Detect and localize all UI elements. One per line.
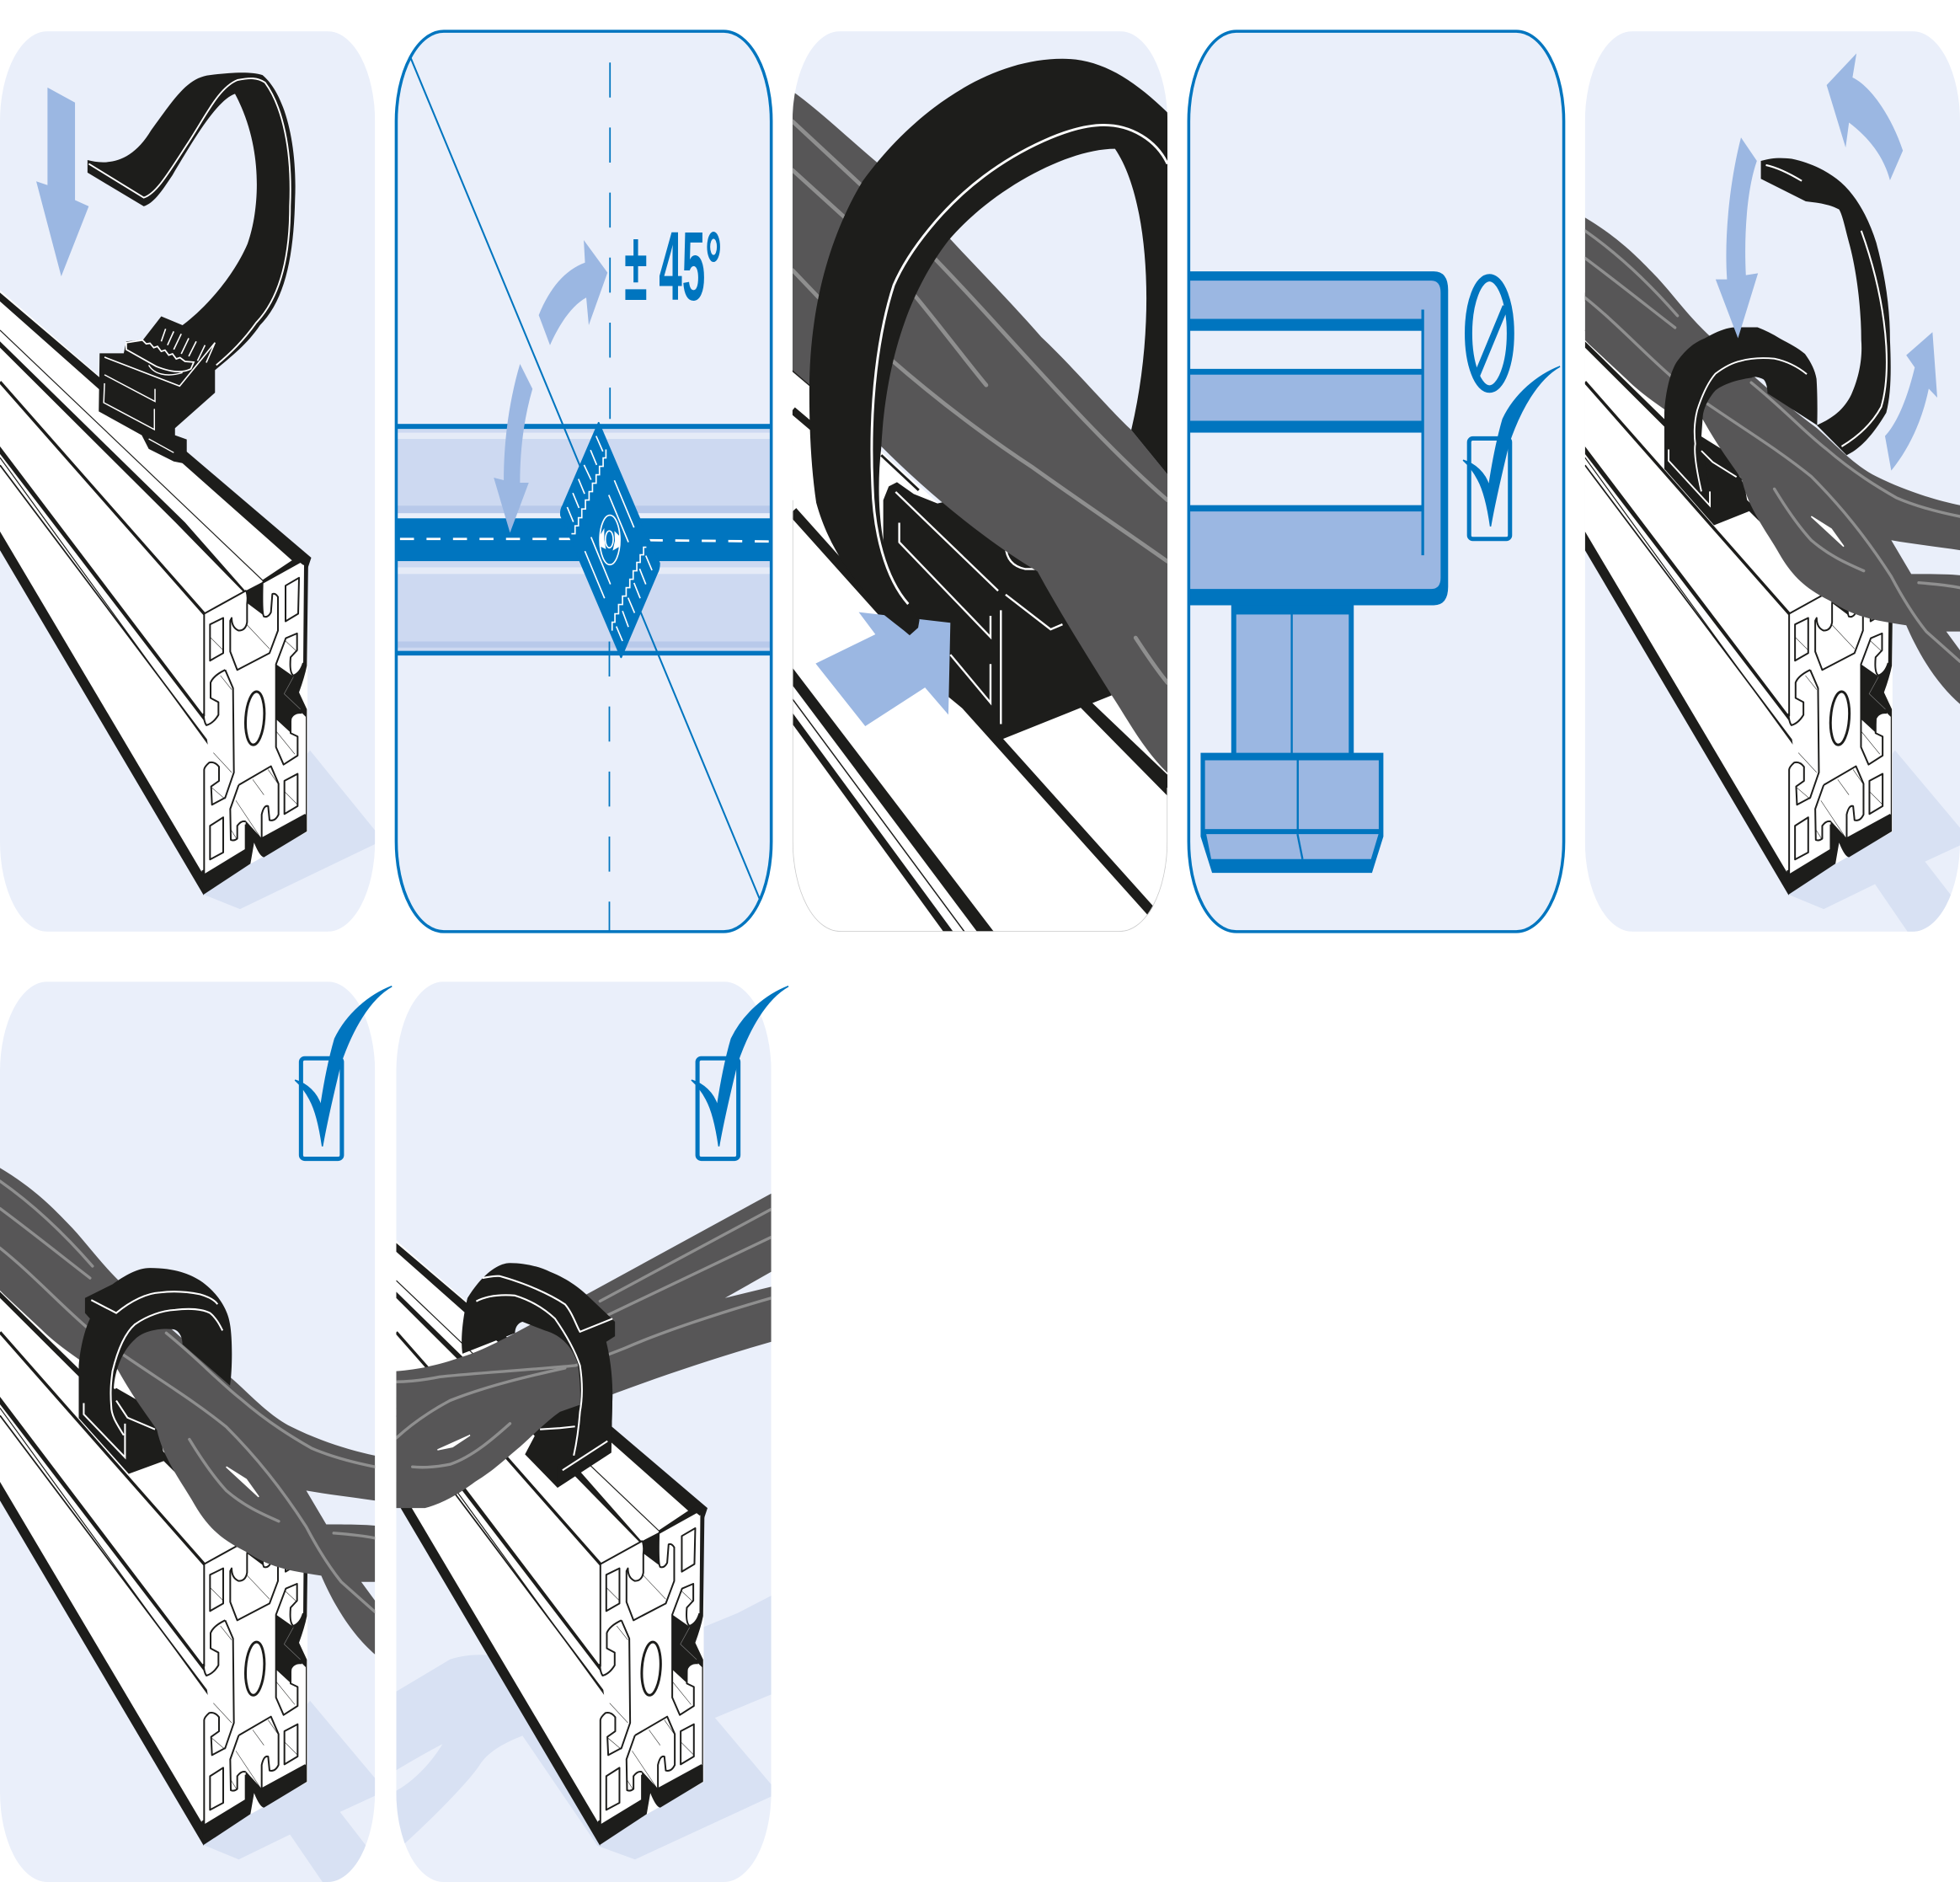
white rail surfaces bbox=[793, 370, 1167, 932]
cable bundle bbox=[396, 1194, 772, 1508]
icon: checkbox tick bbox=[692, 986, 788, 1159]
panel: step 3 strap closeup bbox=[793, 31, 1167, 932]
panel: step 5 tighten strap bbox=[1585, 31, 1960, 932]
panel: step 6 clip closed bbox=[0, 981, 392, 1882]
clip head bbox=[884, 482, 1112, 740]
panel: step 2 rotation angle: ± 45° bbox=[624, 211, 722, 321]
cable bundle bbox=[0, 1168, 375, 1655]
arrow: clockwise bbox=[539, 240, 607, 345]
icon: checkbox tick bbox=[295, 986, 392, 1159]
arrow: press bbox=[815, 612, 950, 726]
large black strap bbox=[809, 59, 1167, 635]
bolt head bbox=[1200, 753, 1383, 873]
clip back bbox=[78, 1388, 165, 1473]
strap tail bbox=[1761, 158, 1891, 455]
icon: checkbox tick bbox=[1463, 366, 1560, 539]
aluminium profile rail bbox=[1585, 290, 1896, 896]
clip front bbox=[462, 1263, 615, 1488]
panel: step 1 insert clip into profile bbox=[0, 31, 375, 932]
aluminium profile rail bbox=[396, 1241, 708, 1846]
panel background bbox=[1188, 31, 1564, 932]
black strap clip bbox=[88, 72, 296, 464]
floor shadow bbox=[202, 1701, 375, 1882]
arrow: upper left bbox=[1827, 53, 1903, 180]
panel background bbox=[396, 31, 772, 932]
panel: step 7 clip closed mirrored bbox=[396, 981, 788, 1882]
clip front bbox=[78, 1268, 232, 1457]
clip front bbox=[1664, 327, 1818, 508]
icon: prohibited bbox=[1468, 278, 1510, 389]
panel: step 2 rotation angle bbox=[396, 31, 772, 932]
floor shadow bbox=[202, 751, 375, 909]
cable bundle bbox=[793, 91, 1167, 773]
rail lines bbox=[793, 370, 1167, 932]
vertical centre dash line bbox=[608, 62, 611, 932]
bolt stem bbox=[1231, 605, 1354, 756]
panel border bbox=[793, 500, 1167, 932]
slot bands top view bbox=[396, 56, 772, 932]
clip back bbox=[1664, 436, 1749, 525]
diagonal line bbox=[410, 56, 761, 903]
arrow: down into clip bbox=[1716, 137, 1758, 339]
clip base rotated bbox=[561, 423, 660, 657]
panel: step 4 side section bbox=[1188, 31, 1564, 932]
aluminium profile rail bbox=[0, 1241, 312, 1846]
floor shadow bbox=[1787, 751, 1960, 932]
panel outline bbox=[396, 31, 772, 932]
arrow: anticlockwise bbox=[494, 364, 532, 532]
clip back bbox=[525, 1394, 613, 1488]
cable bundle bbox=[1585, 217, 1960, 704]
panel outline bbox=[1188, 31, 1564, 932]
T-slot profile section bbox=[1188, 271, 1448, 605]
aluminium profile rail bbox=[0, 290, 312, 896]
arrow: push down bbox=[36, 88, 88, 276]
arrow: up right bbox=[1885, 332, 1937, 471]
floor and cable shadow bbox=[396, 1596, 772, 1859]
